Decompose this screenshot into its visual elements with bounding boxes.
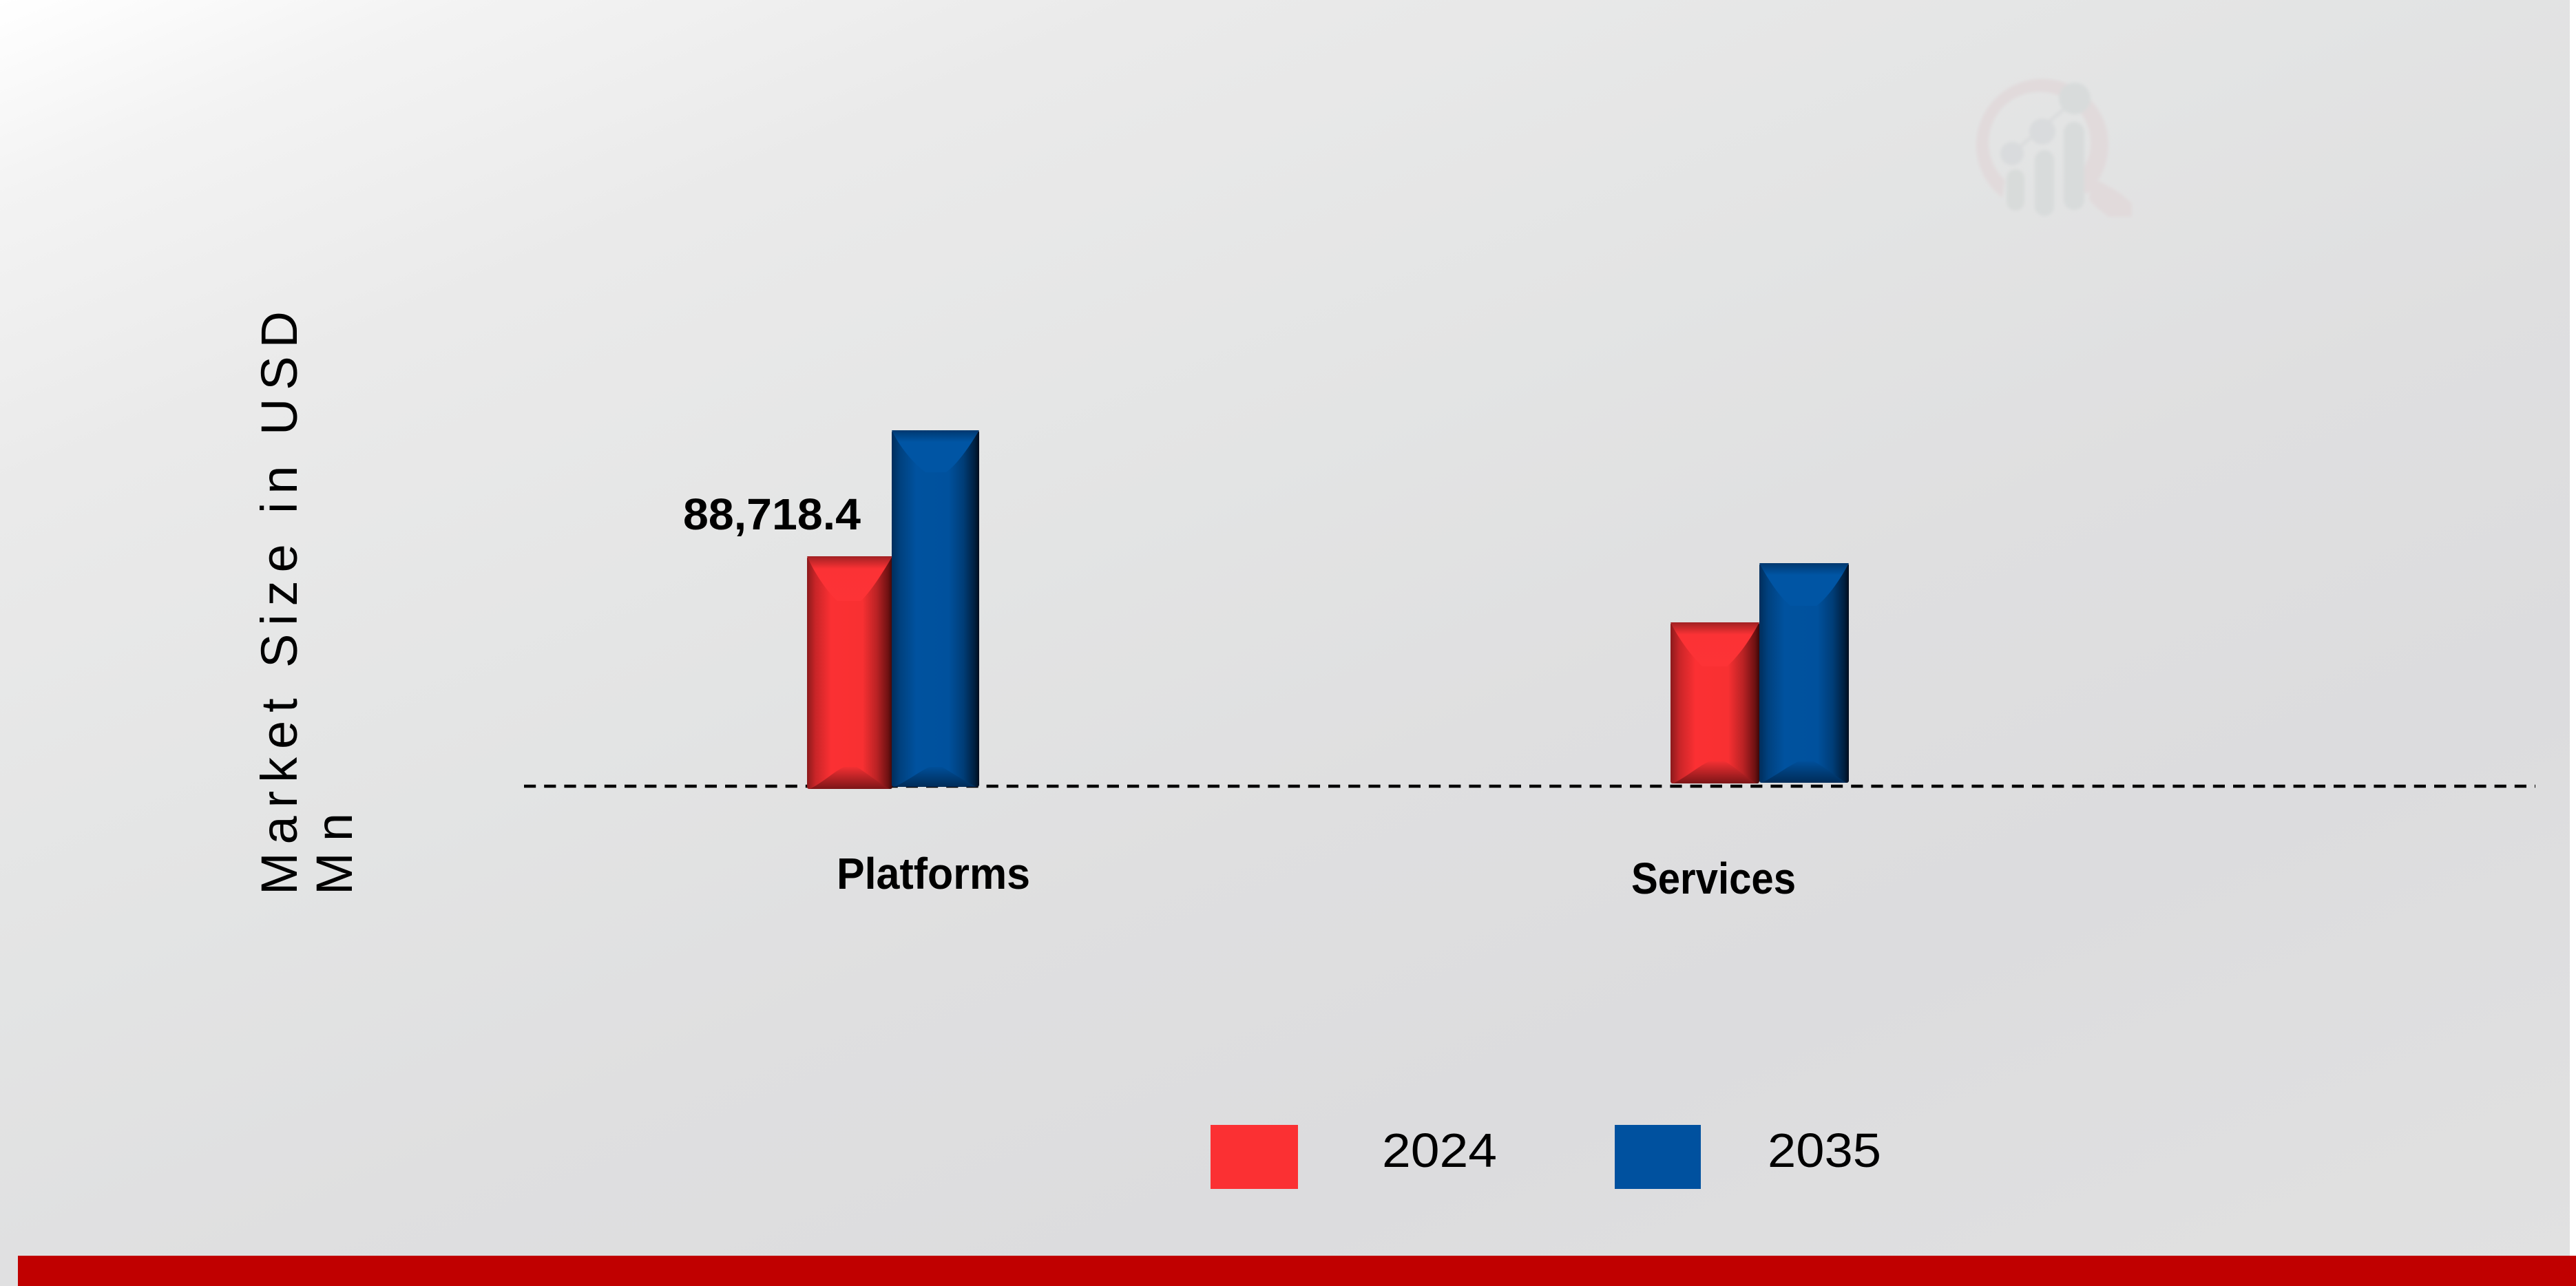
bar: Services 2024 [1671, 622, 1759, 783]
bar: Platforms 2024 [807, 556, 892, 789]
footer bar [18, 1256, 2576, 1286]
legend label: 2024: 2024 [1382, 1124, 1497, 1177]
bar: Platforms 2035 [892, 430, 979, 787]
category label: Services: Services [1631, 854, 1796, 903]
data label: 88,718.4: 88,718.4 [683, 489, 861, 539]
bar: Services 2035 [1759, 563, 1849, 783]
legend swatch: 2024 [1211, 1125, 1298, 1189]
category label: Platforms: Platforms [837, 849, 1030, 898]
legend swatch: 2035 [1615, 1125, 1701, 1189]
y axis title: Market Size in USD [251, 311, 308, 895]
legend label: 2035: 2035 [1768, 1124, 1881, 1177]
icon: watermark logo [1976, 78, 2132, 217]
y axis title: Mn [306, 813, 363, 895]
axis: dashed baseline [524, 785, 2535, 788]
